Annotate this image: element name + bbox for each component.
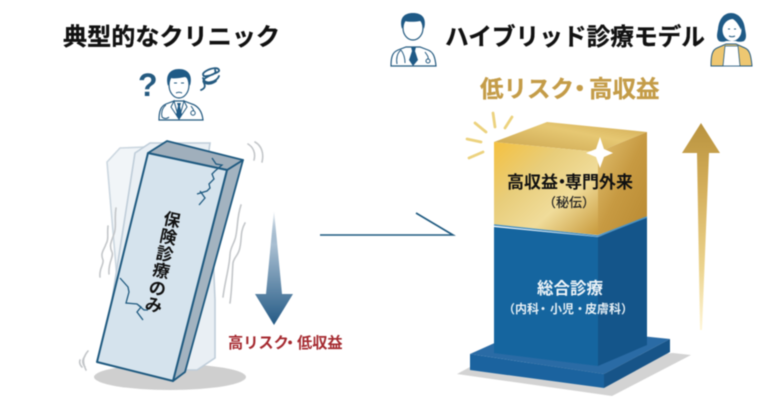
- gold label: 専門外来: [565, 173, 633, 192]
- base side: [604, 339, 670, 388]
- heading: low risk high return: [480, 76, 660, 102]
- label: high risk low return: ・: [282, 335, 298, 352]
- blue sublabel: ・: [537, 302, 549, 316]
- title: hybrid model: ハイブリッド診療モデル: [445, 23, 705, 51]
- illustration: collapsing insurance pillar: [80, 141, 263, 390]
- pillar label: 険: [158, 226, 178, 249]
- icon: question mark: ?: [138, 67, 158, 103]
- heading: low risk high return: ・: [568, 76, 592, 102]
- rays: [467, 113, 512, 158]
- pillar label: [143, 209, 182, 317]
- illustration: hybrid model pedestal: [457, 113, 691, 396]
- blue label: 総合診療: [537, 279, 604, 298]
- gold front: [494, 142, 598, 235]
- pillar label: 療: [151, 260, 171, 282]
- blue highlight edge: [494, 217, 647, 236]
- pillar label: 診: [154, 244, 175, 266]
- gold top: [494, 122, 647, 152]
- blue sublabel: 皮膚科）: [585, 301, 633, 316]
- heading: low risk high return: 低リスク: [480, 76, 574, 102]
- shake lines: [80, 142, 263, 370]
- blue sublabel: ・: [574, 302, 586, 316]
- pillar label: み: [143, 294, 164, 317]
- pillar label: の: [147, 278, 168, 300]
- blue front: [494, 227, 598, 366]
- arrow: down high risk: [255, 210, 293, 325]
- heading: low risk high return: 高収益: [589, 76, 660, 102]
- icon: patient woman: [711, 13, 752, 66]
- icon: worried doctor: [159, 69, 203, 120]
- label: high risk low return: 低収益: [297, 335, 343, 352]
- cracks: [120, 158, 222, 320]
- label: high risk low return: 高リスク: [228, 335, 289, 352]
- icon: dizzy swirl: [201, 68, 219, 90]
- pillar top: [148, 141, 243, 170]
- gold label: [507, 172, 633, 192]
- sparkle: [586, 137, 613, 168]
- gold sublabel: （秘伝）: [543, 195, 595, 210]
- blue sublabel: 小児: [550, 302, 574, 316]
- arrow: up: [682, 123, 720, 330]
- ghost block near: [112, 143, 215, 370]
- pillar label: 保: [162, 209, 182, 231]
- icon: doctor: [391, 13, 436, 66]
- label: high risk low return: [228, 335, 343, 352]
- base front: [470, 354, 604, 388]
- floor shadow: [94, 364, 246, 390]
- base top: [470, 325, 670, 374]
- pillar front: [97, 153, 227, 381]
- blue sublabel: （内科: [503, 301, 539, 316]
- arrow: transition: [320, 213, 453, 235]
- ghost block far: [107, 146, 170, 300]
- pillar side: [173, 160, 243, 381]
- blue side: [598, 217, 647, 366]
- gold side: [598, 132, 647, 235]
- gold label: 高収益: [507, 172, 558, 192]
- title: typical clinic: 典型的なクリニック: [63, 24, 280, 51]
- blue sublabel: [503, 301, 633, 316]
- floor shadow: [457, 353, 691, 396]
- gold label: ・: [554, 173, 570, 192]
